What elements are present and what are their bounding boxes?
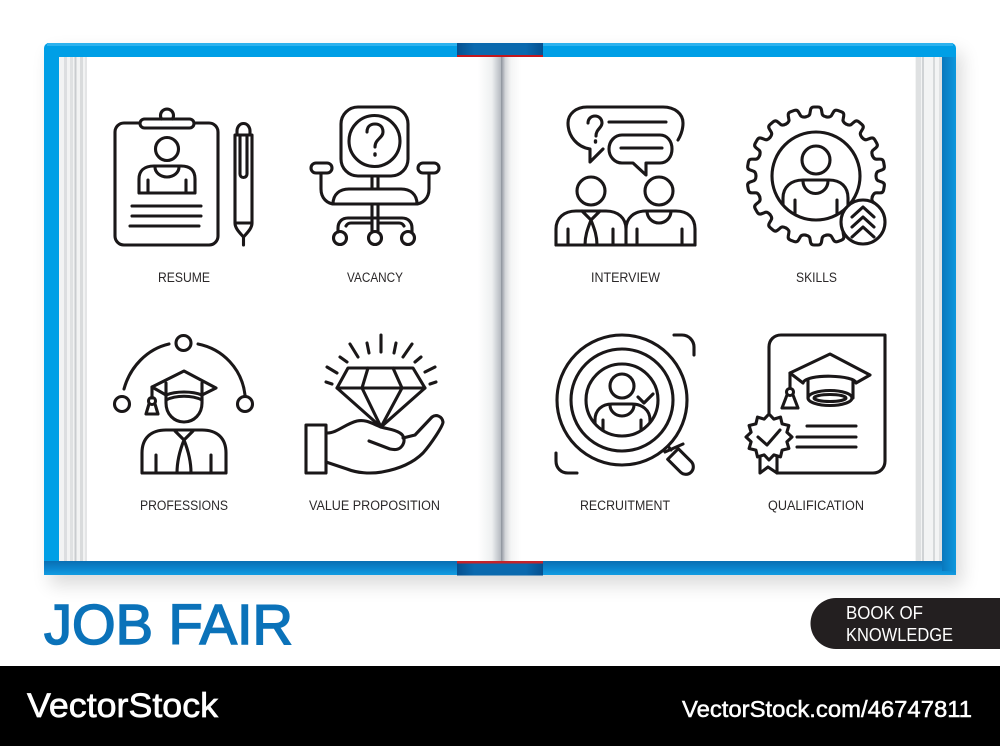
label: interview: INTERVIEW — [591, 270, 660, 285]
label: skills: SKILLS — [796, 270, 837, 285]
item: value proposition — [306, 335, 443, 513]
book cover — [44, 43, 956, 575]
icon: clipboard and pen — [115, 109, 252, 245]
icon: magnifier with candidate — [556, 335, 694, 474]
badge: book of knowledge: BOOK OF — [846, 603, 923, 623]
top headband — [457, 43, 543, 57]
icon: gear with person and chevrons — [746, 107, 886, 245]
item: skills — [746, 107, 886, 285]
footer bar: VectorStock.com/46747811 — [682, 696, 972, 722]
footer bar: VectorStock — [27, 687, 219, 725]
badge: book of knowledge: KNOWLEDGE — [846, 625, 953, 645]
label: value proposition: VALUE PROPOSITION — [309, 498, 440, 513]
item: resume — [115, 109, 252, 285]
icon: office chair with question mark — [311, 107, 439, 244]
icon: diamond on hand — [306, 335, 443, 473]
icon: two people with speech bubbles — [556, 107, 695, 245]
label: vacancy: VACANCY — [347, 270, 403, 285]
item: professions — [114, 336, 252, 513]
book — [44, 43, 962, 585]
label: qualification: QUALIFICATION — [768, 498, 864, 513]
badge: book of knowledge — [810, 598, 1000, 649]
label: recruitment: RECRUITMENT — [580, 498, 670, 513]
item: interview — [556, 107, 695, 285]
item: recruitment — [556, 335, 694, 513]
label: resume: RESUME — [158, 270, 210, 285]
item: qualification — [746, 335, 885, 513]
icon: graduate with orbit — [114, 336, 252, 473]
title: JOB FAIR — [44, 593, 293, 657]
label: professions: PROFESSIONS — [140, 498, 228, 513]
footer bar — [0, 666, 1000, 746]
item: vacancy — [311, 107, 439, 285]
left and right pages — [59, 57, 942, 561]
icon: certificate with cap and badge — [746, 335, 885, 473]
bottom headband — [457, 561, 543, 576]
